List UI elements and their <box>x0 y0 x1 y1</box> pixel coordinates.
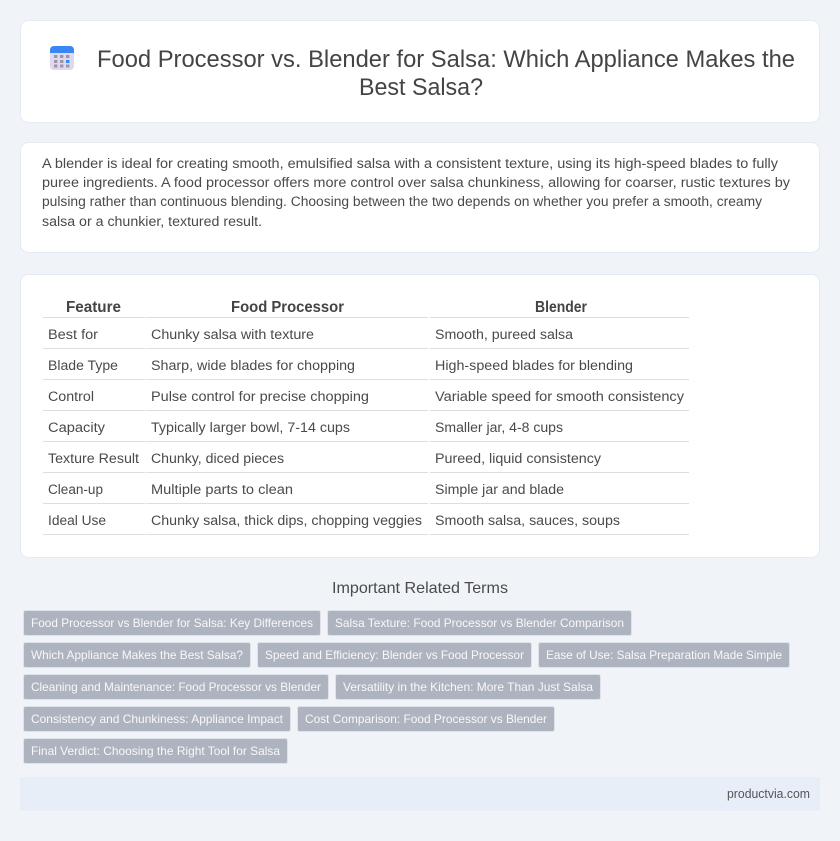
table header: Blender <box>535 299 587 316</box>
row: blade type: Blade Type <box>48 358 118 374</box>
row: blade type: Sharp, wide blades for chopping <box>151 358 355 374</box>
tag list: Salsa Texture: Food Processor vs Blender Comparison <box>335 616 624 630</box>
tag list: Cost Comparison: Food Processor vs Blender <box>305 712 547 726</box>
row: capacity: Smaller jar, 4-8 cups <box>435 420 563 436</box>
row: capacity: Capacity <box>48 420 106 436</box>
intro text: salsa or a chunkier, textured result. <box>42 214 262 230</box>
tag list: Which Appliance Makes the Best Salsa? <box>31 648 243 662</box>
title: Best Salsa? <box>359 74 483 101</box>
row: best for <box>48 327 573 343</box>
intro text: A blender is ideal for creating smooth, emulsified salsa with a consistent texture, using its high-speed blades to fully <box>42 156 779 172</box>
panel: comparison table <box>20 274 820 558</box>
row: texture result: Pureed, liquid consistency <box>435 451 602 467</box>
tag list <box>24 610 790 764</box>
tag list: Food Processor vs Blender for Salsa: Key Differences <box>31 616 313 630</box>
tag list: Versatility in the Kitchen: More Than Just Salsa <box>343 680 593 694</box>
row: capacity: Typically larger bowl, 7-14 cups <box>151 420 350 436</box>
row: ideal use: Chunky salsa, thick dips, chopping veggies <box>151 513 422 529</box>
row: texture result: Chunky, diced pieces <box>151 451 284 467</box>
intro text: pulsing rather than continuous blending. Choosing between the two depends on whether you prefer a smooth, creamy <box>42 194 763 210</box>
row: ideal use: Ideal Use <box>48 513 106 529</box>
table header <box>66 299 587 316</box>
row: control: Variable speed for smooth consistency <box>435 389 685 405</box>
row: best for: Chunky salsa with texture <box>151 327 314 343</box>
row: clean-up: Multiple parts to clean <box>151 482 293 498</box>
row: control <box>48 389 685 405</box>
footer <box>20 777 820 811</box>
tag list: Final Verdict: Choosing the Right Tool for Salsa <box>31 744 280 758</box>
title: Food Processor vs. Blender for Salsa: Which Appliance Makes the <box>97 46 795 73</box>
row: control: Control <box>48 389 94 405</box>
row: clean-up: Clean-up <box>48 482 103 498</box>
heading: related terms: Important Related Terms <box>332 580 508 597</box>
tag list: Consistency and Chunkiness: Appliance Impact <box>31 712 284 726</box>
row: control: Pulse control for precise chopping <box>151 389 369 405</box>
intro text: puree ingredients. A food processor offers more control over salsa chunkiness, allowing for coarser, rustic textures by <box>42 175 791 191</box>
row: clean-up: Simple jar and blade <box>435 482 564 498</box>
panel: title header <box>20 20 820 122</box>
table header: Food Processor <box>231 299 344 316</box>
table header: Feature <box>66 299 121 316</box>
row: capacity <box>48 420 563 436</box>
row: blade type <box>48 358 633 374</box>
intro text <box>42 156 791 230</box>
row: best for: Best for <box>48 327 98 343</box>
footer: productvia.com <box>727 787 810 801</box>
row: texture result: Texture Result <box>48 451 139 467</box>
row: ideal use: Smooth salsa, sauces, soups <box>435 513 620 529</box>
row: best for: Smooth, pureed salsa <box>435 327 573 343</box>
tag list: Cleaning and Maintenance: Food Processor vs Blender <box>31 680 321 694</box>
tag list: Ease of Use: Salsa Preparation Made Simple <box>546 648 782 662</box>
row: clean-up <box>48 482 564 498</box>
title <box>97 46 795 101</box>
tag list: Speed and Efficiency: Blender vs Food Processor <box>265 648 524 662</box>
icon: calendar <box>50 46 74 70</box>
row: texture result <box>48 451 602 467</box>
panel: introduction <box>20 142 820 252</box>
row: ideal use <box>48 513 620 529</box>
row: blade type: High-speed blades for blending <box>435 358 633 374</box>
